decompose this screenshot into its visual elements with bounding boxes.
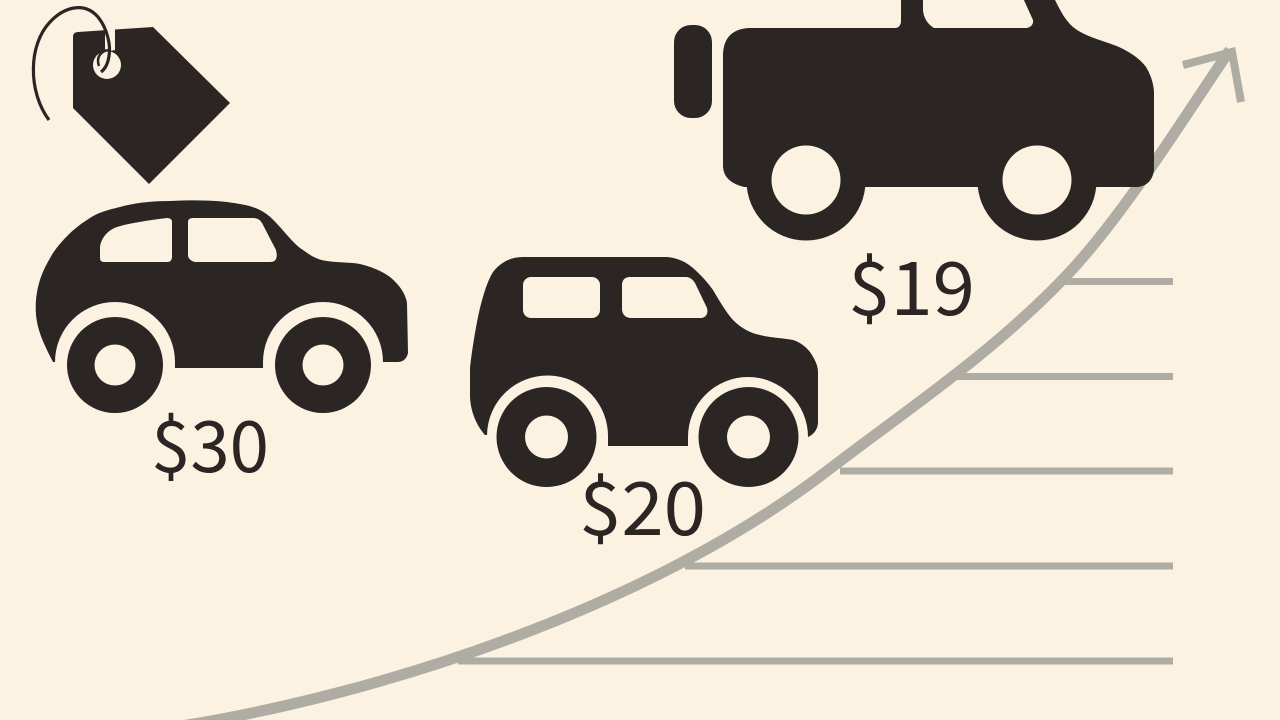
icon: boxy car — [470, 257, 818, 487]
icon: hatchback car — [36, 200, 408, 413]
price label: $20: $20 — [579, 450, 706, 557]
chart: rising curve with horizontal lines — [175, 50, 1241, 720]
icon: large SUV — [674, 0, 1154, 240]
price label: $19: $19 — [848, 230, 975, 337]
price label: $30: $30 — [151, 391, 269, 493]
icon: price tag — [33, 8, 230, 184]
